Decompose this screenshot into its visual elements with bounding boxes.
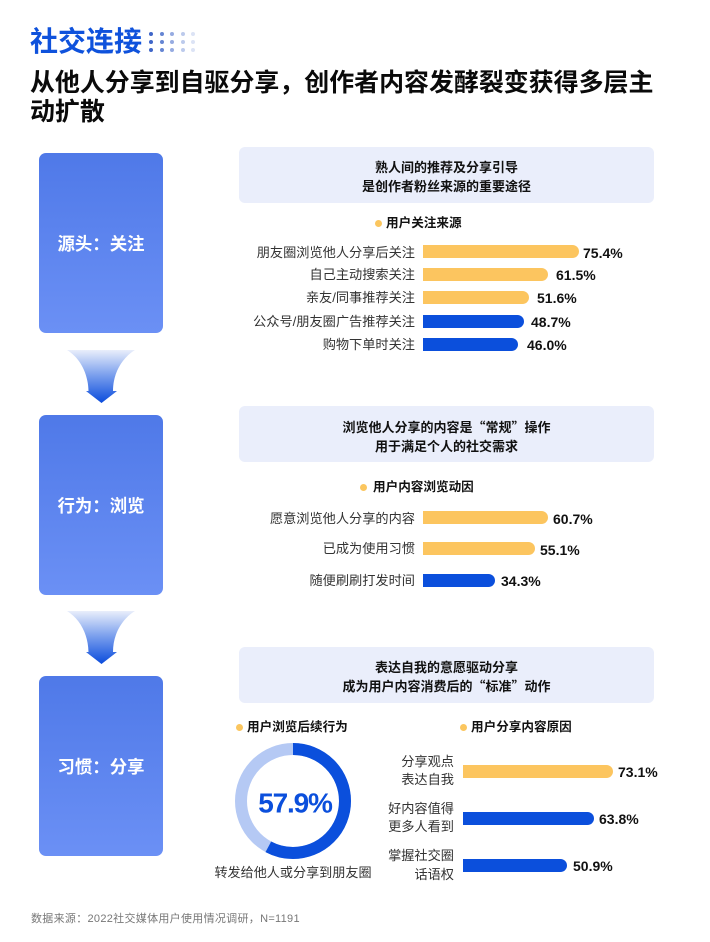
bar chart: follow sources: 61.5% [556,267,596,283]
panel: share insight: 表达自我的意愿驱动分享 [375,657,518,676]
bar chart: share reasons: 分享观点 [401,754,454,769]
section title: 社交连接 [30,26,142,57]
legend: share reasons: 用户分享内容原因 [471,720,572,734]
legend: browse motivation: 用户内容浏览动因 [373,480,474,494]
bar chart: browse motivation: 随便刷刷打发时间 [310,573,415,588]
panel: browse insight: 用于满足个人的社交需求 [375,436,518,455]
bar chart: share reasons: 好内容值得 [388,801,454,816]
decorative dot grid [149,32,195,52]
headline: 从他人分享到自驱分享，创作者内容发酵裂变获得多层主 [30,69,653,97]
stage box: habit share [39,676,163,856]
panel: referral insight [239,147,654,203]
stage box: behavior browse [39,415,163,595]
panel: browse insight: 浏览他人分享的内容是“常规”操作 [342,417,550,436]
bar chart: follow sources: 自己主动搜索关注 [310,267,415,282]
bar chart: browse motivation: 55.1% [540,542,580,558]
bar chart: share reasons: 更多人看到 [388,819,454,834]
bar chart: share reasons [388,754,658,882]
bar chart: browse motivation: 34.3% [501,573,541,589]
panel: browse insight [239,406,654,462]
bar chart: browse motivation: 60.7% [553,511,593,527]
bar chart: follow sources: 亲友/同事推荐关注 [306,290,415,305]
donut chart: 57.9%: 57.9% [258,788,333,818]
bar chart: follow sources: 46.0% [527,337,567,353]
bar chart: follow sources: 75.4% [583,245,623,261]
bar chart: browse motivation [270,511,593,589]
arrow: source to browse [68,350,134,403]
donut chart: 57.9% [235,743,351,859]
stage box: source follow [39,153,163,333]
legend: post-browse behavior: 用户浏览后续行为 [247,720,348,734]
bar chart: share reasons: 63.8% [599,811,639,827]
panel: referral insight: 是创作者粉丝来源的重要途径 [362,176,531,194]
bar chart: follow sources: 51.6% [537,290,577,306]
bar chart: follow sources: 购物下单时关注 [323,337,415,352]
donut caption: 转发给他人或分享到朋友圈 [214,865,372,880]
bar chart: share reasons: 73.1% [618,764,658,780]
stage box: source follow: 源头：关注 [58,234,144,254]
headline: 动扩散 [30,98,105,126]
stage box: behavior browse: 行为：浏览 [58,496,144,516]
headline [30,69,653,126]
panel: share insight [239,647,654,703]
bar chart: follow sources: 朋友圈浏览他人分享后关注 [257,245,415,260]
legend: follow sources: 用户关注来源 [386,216,462,230]
arrow: browse to share [68,611,134,664]
bar chart: share reasons: 50.9% [573,858,613,874]
bar chart: share reasons: 话语权 [414,866,454,882]
panel: referral insight: 熟人间的推荐及分享引导 [375,157,518,176]
bar chart: follow sources [253,245,623,353]
bar chart: browse motivation: 愿意浏览他人分享的内容 [270,511,415,526]
bar chart: browse motivation: 已成为使用习惯 [323,541,415,556]
bar chart: follow sources: 48.7% [531,314,571,330]
bar chart: share reasons: 表达自我 [401,772,454,787]
data source note: 数据来源：2022社交媒体用户使用情况调研，N=1191 [31,913,300,925]
stage box: habit share: 习惯：分享 [58,757,144,777]
bar chart: follow sources: 公众号/朋友圈广告推荐关注 [253,314,415,329]
bar chart: share reasons: 掌握社交圈 [388,848,454,863]
panel: share insight: 成为用户内容消费后的“标准”动作 [342,676,550,695]
